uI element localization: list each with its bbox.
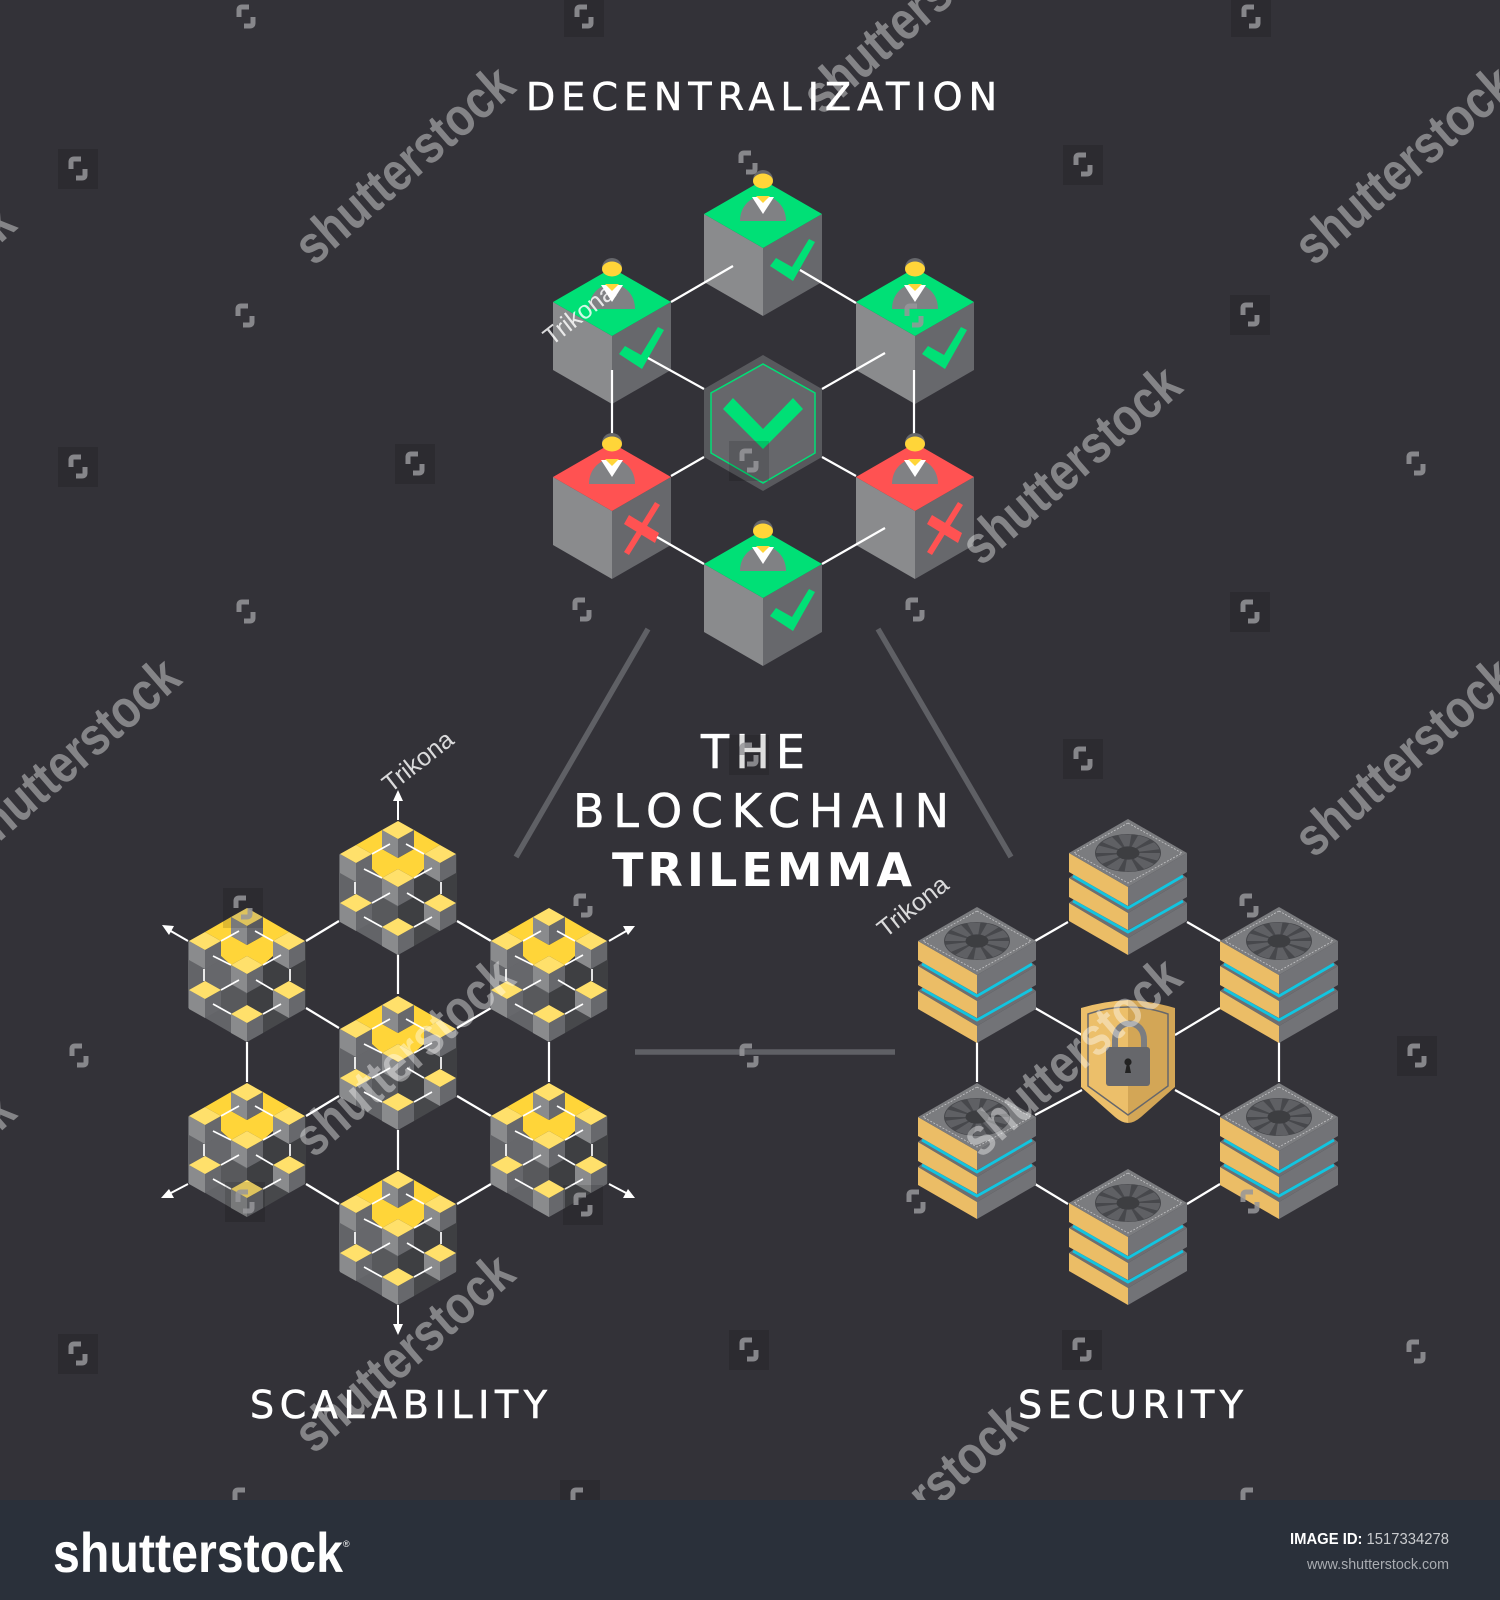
watermark: Trikona labels: Trikona <box>872 870 954 943</box>
center hexagon with check <box>704 355 822 491</box>
heading: decentralization: DECENTRALIZATION <box>526 75 997 119</box>
server: upper left <box>918 907 1036 1043</box>
person: upper right <box>892 258 938 309</box>
watermark texts: shutterstock <box>283 1241 526 1464</box>
title: the blockchain trilemma: THE <box>700 725 805 779</box>
watermark texts: shutterstock <box>950 945 1193 1168</box>
watermark: Trikona labels <box>377 278 954 943</box>
scalability links <box>247 921 549 1204</box>
server: top <box>1069 819 1187 955</box>
block: bottom <box>339 1171 457 1305</box>
block: center <box>339 996 457 1130</box>
footer bar <box>0 1500 1500 1600</box>
triangle edges <box>516 629 1011 1052</box>
server: lower left <box>918 1083 1036 1219</box>
network links <box>612 266 914 564</box>
server: lower right <box>1220 1083 1338 1219</box>
node: bottom <box>704 530 822 666</box>
panel: scalability network <box>161 790 635 1335</box>
panel: decentralization network <box>553 170 974 666</box>
watermark texts: shutterstock <box>283 945 526 1168</box>
title: the blockchain trilemma: TRILEMMA <box>612 843 912 897</box>
block: lower right <box>490 1083 608 1217</box>
website: www.shutterstock.com <box>1306 1556 1449 1573</box>
title: the blockchain trilemma <box>573 725 949 897</box>
person: upper left <box>589 258 635 309</box>
shield with padlock <box>1081 1000 1175 1123</box>
watermark: Trikona labels: Trikona <box>377 725 459 798</box>
block: upper right <box>490 908 608 1042</box>
node: top <box>704 180 822 316</box>
node: lower right rejected <box>856 443 974 579</box>
block: lower left <box>188 1083 306 1217</box>
node: upper right <box>856 268 974 404</box>
image id: IMAGE ID: 1517334278 <box>1290 1531 1449 1548</box>
server: bottom <box>1069 1169 1187 1305</box>
block: upper left <box>188 908 306 1042</box>
footer logo: shutterstock <box>53 1521 344 1584</box>
person: bottom <box>740 520 786 571</box>
watermark texts: shutterstock <box>283 53 526 276</box>
person: lower right <box>892 433 938 484</box>
heading: scalability: SCALABILITY <box>250 1383 548 1427</box>
growth arrows <box>161 790 635 1335</box>
node: lower left rejected <box>553 443 671 579</box>
watermark texts: shutterstock <box>950 353 1193 576</box>
title: the blockchain trilemma: BLOCKCHAIN <box>573 784 949 838</box>
watermark: Trikona labels: Trikona <box>538 278 620 351</box>
server: upper right <box>1220 907 1338 1043</box>
block: top <box>339 821 457 955</box>
security links <box>977 922 1279 1204</box>
node: upper left <box>553 268 671 404</box>
person: top <box>740 170 786 221</box>
registered mark: ® <box>343 1539 350 1549</box>
person: lower left <box>589 433 635 484</box>
panel: security network <box>918 819 1338 1305</box>
heading: security: SECURITY <box>1018 1383 1244 1427</box>
